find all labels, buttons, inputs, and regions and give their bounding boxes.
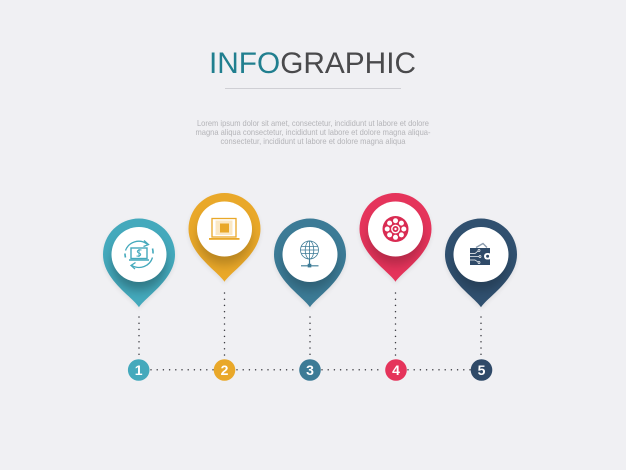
step 4 badge: 4 xyxy=(392,362,400,378)
intro text: magna aliqua consectetur, incididunt ut labore et dolore magna aliqua- xyxy=(196,127,431,137)
step 2 badge: 2 xyxy=(221,362,229,378)
pin 3: steel blue xyxy=(274,218,346,309)
step 4 badge xyxy=(385,359,407,381)
intro text xyxy=(196,118,431,146)
step 3 badge xyxy=(299,359,321,381)
pin 2: amber xyxy=(188,193,260,284)
pin 1: teal xyxy=(103,218,175,309)
pin 4: crimson xyxy=(360,193,432,284)
intro text: Lorem ipsum dolor sit amet, consectetur, incididunt ut labore et dolore xyxy=(197,118,429,128)
dotted connectors xyxy=(139,293,481,370)
step 5 badge xyxy=(471,359,492,381)
pin 5: navy xyxy=(445,218,517,309)
step 1 badge: 1 xyxy=(135,362,143,378)
intro text: consectetur, incididunt ut labore et dolore magna aliqua xyxy=(220,136,406,146)
step 3 badge: 3 xyxy=(306,362,314,378)
icon: laptop with dollar and cycle arrows xyxy=(125,240,153,269)
icon: gear wheel xyxy=(382,216,408,242)
icon: circuit wallet xyxy=(470,244,492,265)
step 1 badge xyxy=(128,359,150,381)
step 5 badge: 5 xyxy=(478,362,486,378)
icon: laptop with chip xyxy=(209,218,240,240)
icon: globe network xyxy=(300,241,318,267)
step 2 badge xyxy=(214,359,235,381)
title: INFOGRAPHIC xyxy=(209,47,416,80)
